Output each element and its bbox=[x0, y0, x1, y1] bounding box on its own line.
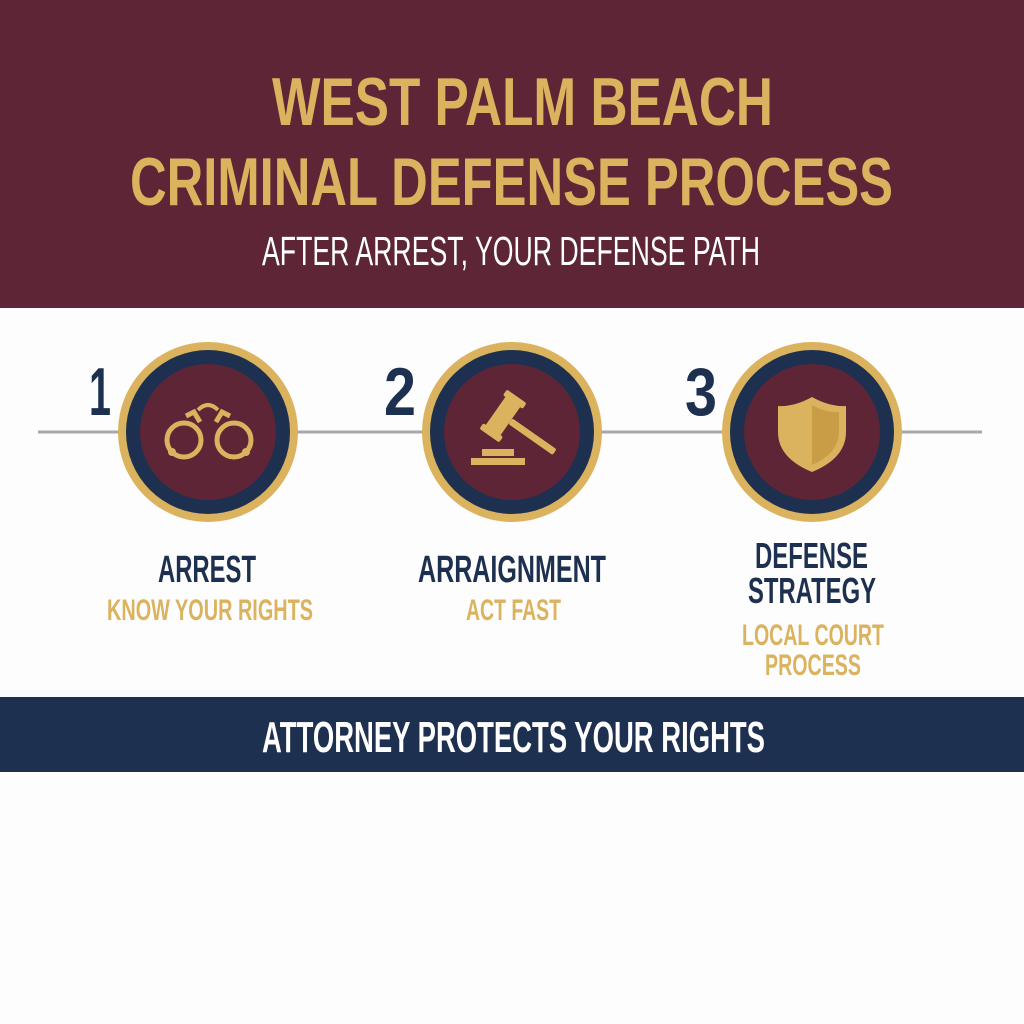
subtitle: AFTER ARREST, YOUR DEFENSE PATH bbox=[262, 228, 760, 274]
label: arrest bbox=[107, 549, 313, 627]
header band bbox=[0, 0, 1024, 308]
label: arrest: KNOW YOUR RIGHTS bbox=[107, 594, 313, 627]
number 3: 3 bbox=[685, 354, 717, 430]
number 2: 2 bbox=[384, 354, 416, 430]
label: defense strategy: STRATEGY bbox=[748, 570, 876, 611]
title bbox=[130, 64, 893, 220]
bottom banner bbox=[0, 697, 1024, 772]
step 1 bbox=[89, 342, 313, 627]
label: arraignment: ACT FAST bbox=[466, 594, 561, 627]
label: arrest: ARREST bbox=[158, 549, 256, 591]
icon circle: handcuffs bbox=[118, 342, 298, 522]
label: defense strategy: PROCESS bbox=[765, 649, 861, 682]
timeline line bbox=[38, 430, 982, 434]
label: defense strategy bbox=[742, 535, 884, 682]
title: WEST PALM BEACH bbox=[272, 64, 773, 140]
number 1: 1 bbox=[89, 354, 111, 430]
label: arraignment: ARRAIGNMENT bbox=[418, 549, 606, 591]
icon circle: shield bbox=[722, 342, 902, 522]
step 2 bbox=[384, 342, 606, 627]
step 3 bbox=[685, 342, 902, 682]
label: arraignment bbox=[418, 549, 606, 627]
label: defense strategy: LOCAL COURT bbox=[742, 619, 884, 652]
icon circle: gavel bbox=[422, 342, 602, 522]
label: defense strategy: DEFENSE bbox=[755, 535, 868, 576]
